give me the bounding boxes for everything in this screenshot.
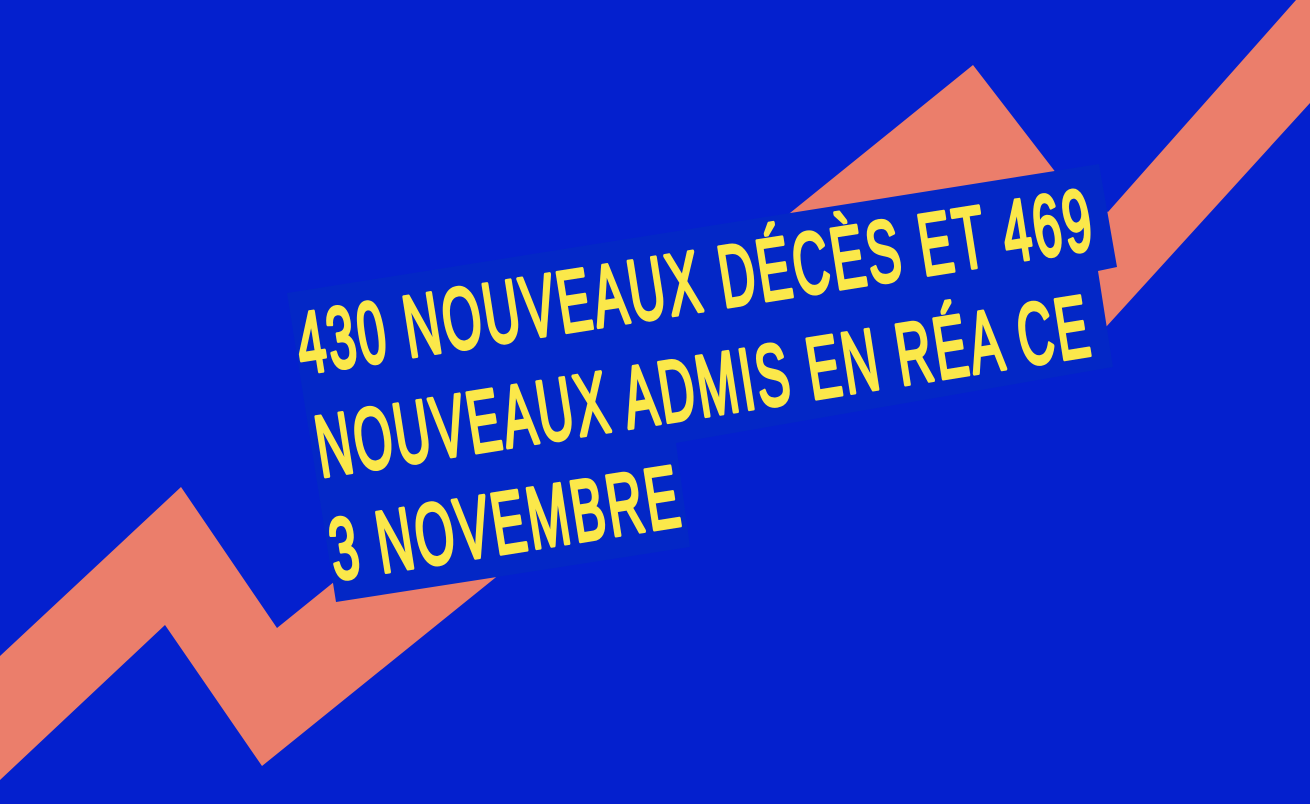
headline line 3: 3 NOVEMBRE: [323, 447, 689, 599]
panel background: [287, 164, 1117, 602]
headline panel: [287, 164, 1117, 602]
